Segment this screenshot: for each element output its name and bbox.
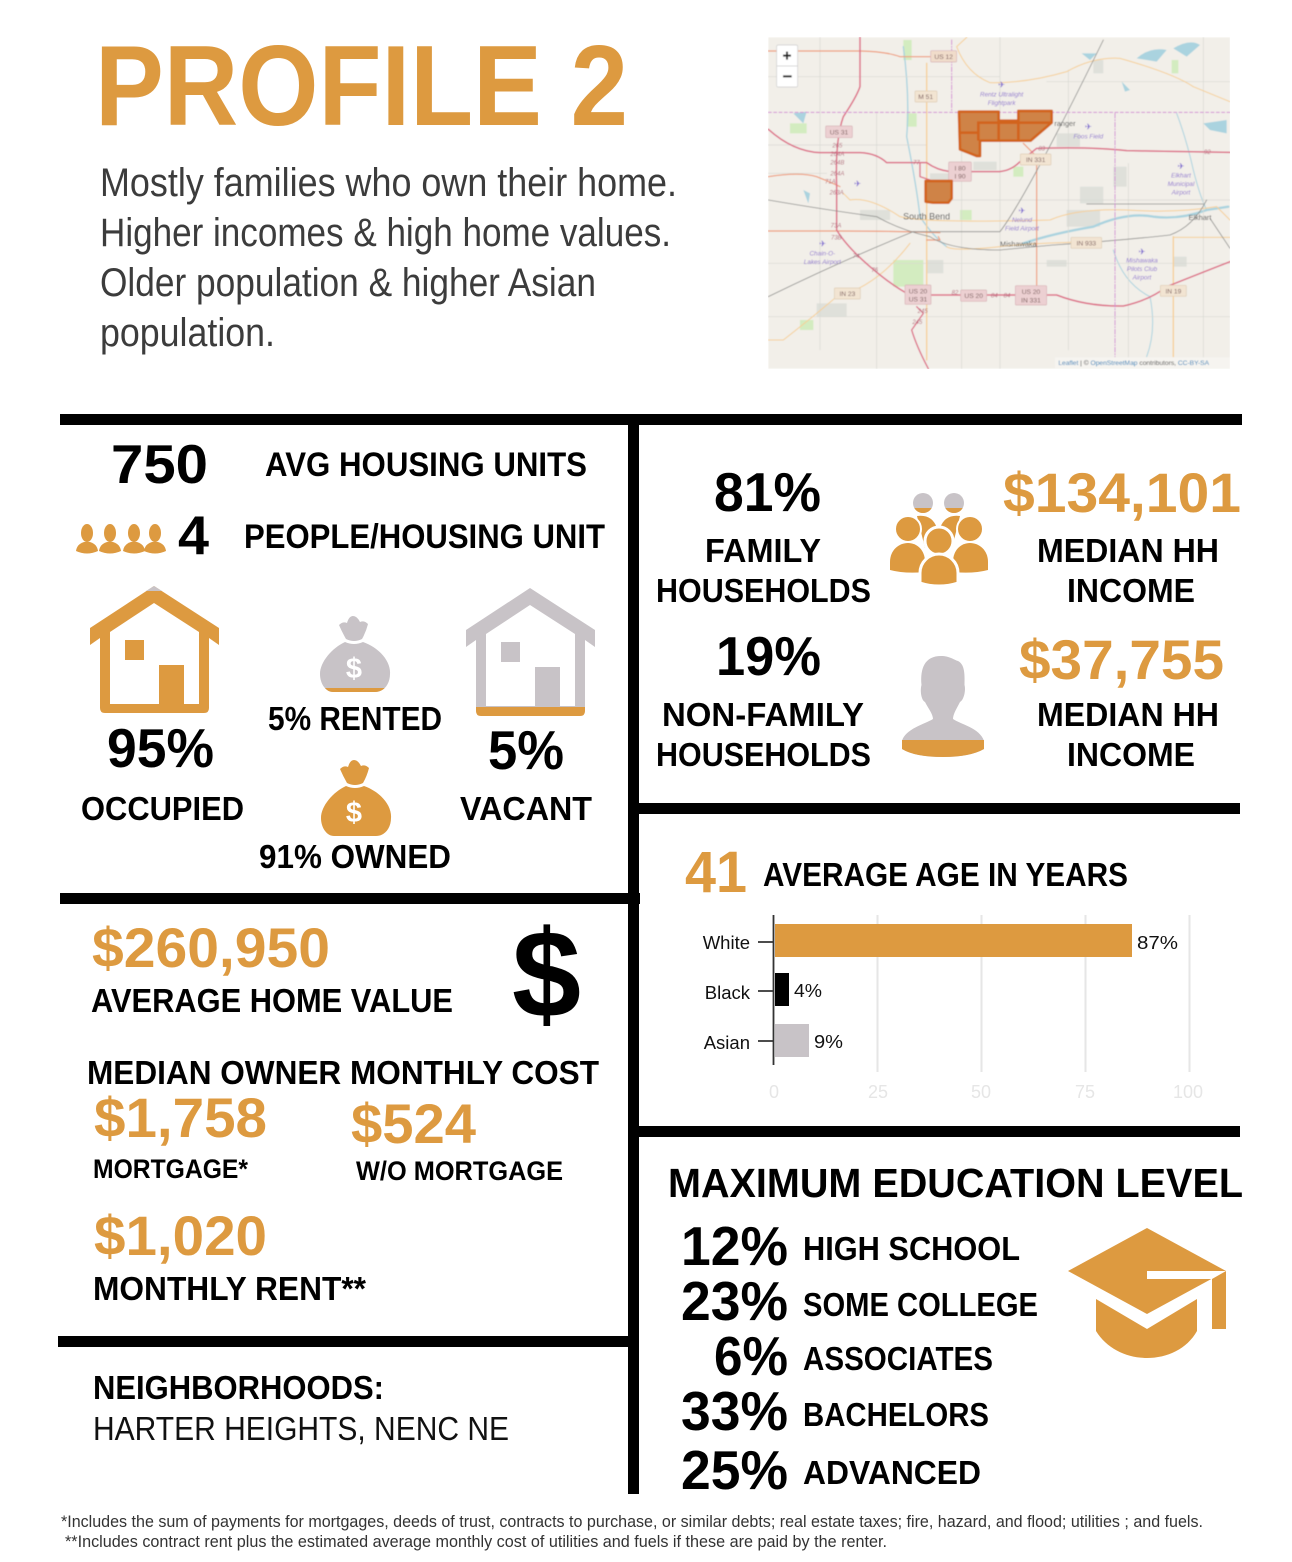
without mortgage cost: $524 [351,1092,476,1155]
family households stat: FAMILY [705,532,821,569]
map of South Bend area: Leaflet | © OpenStreetMap contributors, CC-BY-SA [1058,359,1210,367]
panel: neighborhoods [93,1369,509,1447]
icon: vacant house [466,588,595,716]
map of South Bend area: 77 [913,161,920,167]
some college row: SOME COLLEGE [803,1286,1038,1323]
people per housing unit stat: 4 [178,504,209,566]
map of South Bend area [768,37,1230,369]
map of South Bend area: ✈ [819,239,827,249]
associates row: ASSOCIATES [803,1340,993,1377]
associates row: 6% [714,1325,788,1387]
map of South Bend area: Elkhart [1171,173,1191,180]
map of South Bend area: ✈ [998,80,1006,90]
panel: neighborhoods: HARTER HEIGHTS, NENC NE [93,1410,509,1447]
panel: average age: AVERAGE AGE IN YEARS [763,856,1128,893]
high school row [681,1215,1020,1277]
average home value: $260,950 [92,916,330,979]
map of South Bend area: M 51 [918,94,933,101]
map of South Bend area: ✈ [1138,247,1146,257]
map of South Bend area: ✈ [1085,121,1093,131]
high income stat: MEDIAN HH [1037,532,1219,569]
mortgage cost: MORTGAGE* [93,1154,248,1184]
map of South Bend area: Pilots Club [1127,266,1158,273]
map of South Bend area: 264A [829,152,844,158]
avg housing units stat: AVG HOUSING UNITS [265,446,587,484]
subtitle description [100,161,677,355]
lower income stat [1019,628,1224,773]
map of South Bend area: ✈ [1177,161,1185,171]
map of South Bend area: US 20 [964,293,983,300]
monthly rent [93,1204,366,1307]
family households stat: HOUSEHOLDS [656,572,871,609]
map of South Bend area: South Bend [903,211,950,221]
bar: black [775,973,822,1006]
bar: white [775,924,1178,957]
map of South Bend area: 73A [831,223,841,229]
panel: average age [685,840,1128,905]
map of South Bend area: Flightpark [988,100,1016,107]
map of South Bend area: 264A [829,172,844,178]
lower income stat: $37,755 [1019,628,1224,691]
lower income stat: MEDIAN HH [1037,696,1219,733]
map of South Bend area: Airport [1171,189,1191,196]
without mortgage cost: W/O MORTGAGE [356,1156,563,1186]
map of South Bend area: Lakes Airport [804,259,841,266]
icon: owned money bag [321,760,391,836]
lower income stat: INCOME [1067,736,1195,773]
panel: average age: 41 [685,840,747,905]
advanced row: 25% [681,1439,788,1501]
icon: family group [890,493,988,586]
monthly rent: $1,020 [94,1204,267,1267]
bar chart: race: 0 [769,1082,779,1102]
map of South Bend area: 245 [917,309,928,315]
high school row: 12% [681,1215,788,1277]
map of South Bend area: US 12 [934,54,953,61]
map of South Bend area: IN 933 [1077,240,1096,247]
occupied stat: 95% [107,717,214,779]
map of South Bend area: Municipal [1168,181,1195,188]
high income stat: INCOME [1067,572,1195,609]
avg housing units stat: 750 [111,433,208,495]
map of South Bend area: Airport [1132,275,1152,282]
title: PROFILE 2 [95,23,628,150]
map of South Bend area: Chain-O- [809,251,835,258]
map of South Bend area: ✈ [854,179,862,189]
vacant stat: VACANT [460,790,592,827]
map of South Bend area: US 31 [830,130,849,137]
high school row: HIGH SCHOOL [803,1230,1020,1267]
map of South Bend area: 265 [831,143,843,149]
vacant stat [460,719,592,827]
map of South Bend area: 76 [871,268,879,274]
bar: white: 87% [1137,932,1178,953]
bachelors row: 33% [681,1380,788,1442]
icon: rented money bag: $ [346,653,362,685]
map of South Bend area: Mishawaka [1126,258,1158,265]
bar chart: race [703,915,1203,1102]
map of South Bend area: 82 [952,291,959,297]
bachelors row: BACHELORS [803,1396,989,1433]
map of South Bend area: 71A [825,180,836,186]
map of South Bend area: IN 331 [1021,297,1041,304]
panel: housing [76,433,605,875]
map of South Bend area: US 31 [909,297,928,304]
monthly rent: MONTHLY RENT** [93,1270,366,1307]
bar: asian [775,1024,843,1057]
map of South Bend area: 92 [1204,150,1211,156]
map of South Bend area: 74 [853,254,860,260]
associates row [714,1325,993,1387]
non-family households stat [656,625,871,773]
icon: four people [76,524,166,554]
black frame dividers [58,414,1242,1494]
people per housing unit stat [178,504,605,566]
icon: dollar sign: $ [512,906,581,1044]
panel: home costs [87,906,599,1307]
map of South Bend area: Elkhart [1189,213,1211,222]
map of South Bend area: IN 19 [1165,288,1182,295]
bachelors row [681,1380,989,1442]
avg housing units stat [111,433,587,495]
panel: education [668,1160,1243,1501]
icon: graduation cap [1068,1228,1226,1358]
panel: households and income [656,461,1241,773]
rented label: 5% RENTED [268,700,442,737]
mortgage cost: $1,758 [94,1086,267,1149]
map of South Bend area: 264B [829,161,844,167]
subtitle description: population. [100,311,275,355]
non-family households stat: 19% [716,625,821,687]
map of South Bend area: 73B [831,235,842,241]
bar chart: race: 75 [1075,1082,1095,1102]
icon: single person [902,656,984,757]
median owner monthly cost heading: MEDIAN OWNER MONTHLY COST [87,1054,599,1091]
map of South Bend area: Field Airport [1005,225,1039,232]
icon: owned money bag: $ [346,797,362,829]
map of South Bend area: ranger [1054,119,1076,128]
average home value: AVERAGE HOME VALUE [91,982,453,1019]
owned label: 91% OWNED [259,838,451,875]
bar chart: race: White [703,932,750,953]
bar chart: race: Black [705,982,751,1003]
occupied stat: OCCUPIED [81,790,244,827]
map of South Bend area: I 90 [954,174,966,181]
map of South Bend area: Foos Field [1074,133,1104,140]
footnotes: *Includes the sum of payments for mortgages, deeds of trust, contracts to purchase, or similar debts; real estate taxes; fire, hazard, and flood; utilities ; and fuels. [61,1513,1203,1531]
map of South Bend area: Rentz Ultralight [980,92,1024,99]
map of South Bend area: IN 331 [1026,157,1046,164]
map of South Bend area: 84 [1004,293,1011,299]
non-family households stat: NON-FAMILY [662,696,864,733]
family households stat: 81% [714,461,821,523]
family households stat [656,461,871,609]
bar chart: race: 100 [1173,1082,1203,1102]
some college row [681,1270,1038,1332]
some college row: 23% [681,1270,788,1332]
bar: asian: 9% [814,1031,843,1052]
education heading: MAXIMUM EDUCATION LEVEL [668,1160,1243,1206]
map of South Bend area: Mishawaka [1000,240,1038,249]
map of South Bend area: 83 [1038,147,1046,153]
icon: occupied house [90,586,219,713]
bar chart: race: Asian [704,1032,750,1053]
map of South Bend area: 263A [829,191,844,197]
mortgage cost [93,1086,267,1184]
map of South Bend area: IN 23 [839,291,856,298]
non-family households stat: HOUSEHOLDS [656,736,871,773]
subtitle description: Older population & higher Asian [100,261,596,305]
advanced row [681,1439,981,1501]
panel: neighborhoods: NEIGHBORHOODS: [93,1369,384,1406]
bar: black: 4% [794,980,822,1001]
map of South Bend area: US 20 [1022,289,1041,296]
people per housing unit stat: PEOPLE/HOUSING UNIT [244,518,605,556]
map of South Bend area: US 20 [909,288,928,295]
subtitle description: Higher incomes & high home values. [100,211,671,255]
vacant stat: 5% [488,719,564,781]
bar chart: race: 25 [868,1082,888,1102]
average home value [91,916,453,1019]
advanced row: ADVANCED [803,1454,981,1491]
subtitle description: Mostly families who own their home. [100,161,677,205]
occupied stat [81,717,244,827]
without mortgage cost [351,1092,563,1186]
map of South Bend area: ✈ [1018,205,1026,215]
map of South Bend area: 245 [911,320,923,326]
map of South Bend area: I 80 [954,165,966,172]
high income stat: $134,101 [1003,461,1241,524]
map of South Bend area: Nelund [1012,217,1033,224]
high income stat [1003,461,1241,609]
bar chart: race: 50 [971,1082,991,1102]
footnotes [61,1513,1203,1551]
icon: rented money bag [320,616,390,692]
map of South Bend area: 84 [991,293,998,299]
footnotes: **Includes contract rent plus the estimated average monthly cost of utilities and fuels if these are paid by the renter. [65,1533,887,1551]
